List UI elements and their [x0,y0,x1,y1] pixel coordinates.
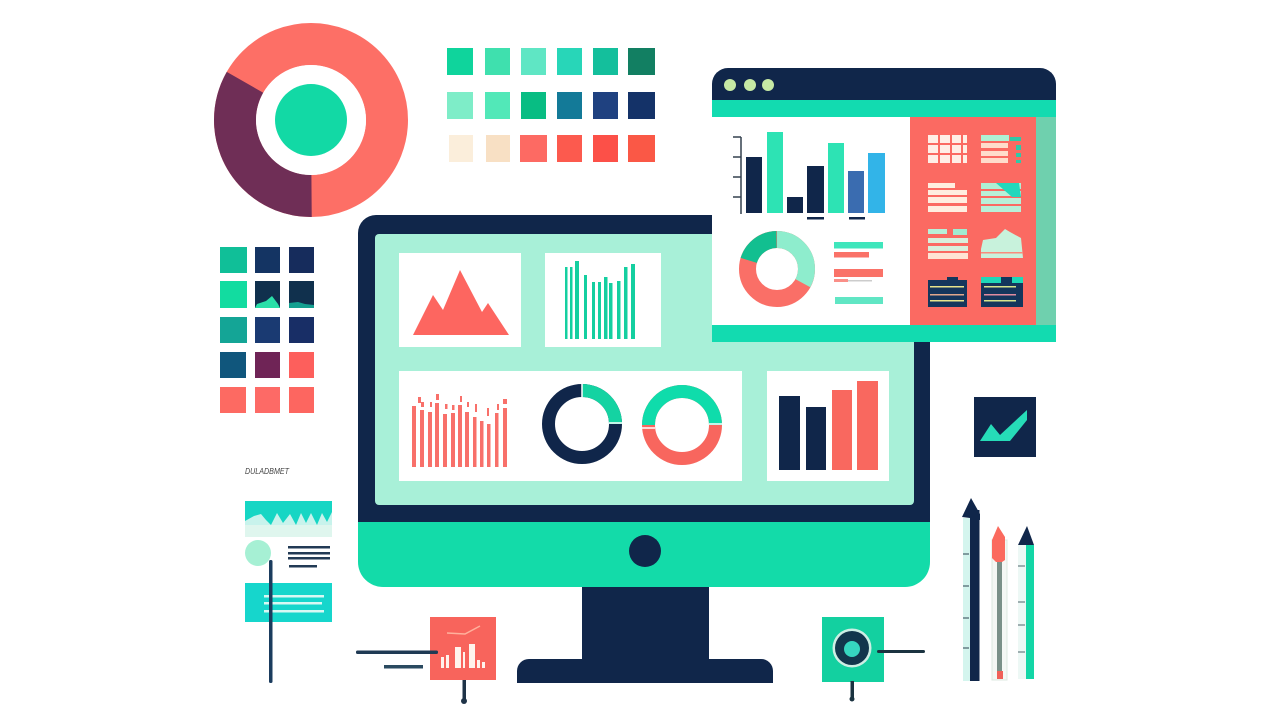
monitor stand [517,585,773,683]
mini document icon [928,183,967,212]
mini green document icon [981,183,1021,212]
mini navy and green list icon [981,277,1023,307]
mini list icon [981,135,1021,163]
mini area icon [981,229,1023,258]
window donut chart [740,232,814,306]
mini navy list icon [928,277,967,307]
window legend bars [834,242,883,304]
monitor body [358,215,930,522]
panel: wide charts [399,371,742,481]
icon: green gear tile [822,617,925,702]
monitor [358,215,930,683]
coral bar chart [412,394,507,467]
icon: coral pencil [992,526,1007,680]
window content [712,117,910,325]
icon: green pencil [1018,526,1034,679]
bar chart [733,132,885,220]
window side strip [1036,117,1056,325]
coral side panel [910,117,1036,325]
window bottom band [712,325,1056,342]
icon: coral chart tile [356,617,496,704]
mini mixed list icon [928,229,968,259]
window control dots [724,79,774,91]
panel: green bar chart [545,253,661,347]
panel: navy and coral bars [767,371,889,481]
colour swatch palette [447,48,655,162]
power button [629,535,661,567]
browser window [712,68,1056,342]
side report card [245,501,332,683]
monitor screen [375,234,914,505]
window title bar [712,68,1056,101]
panel: mountain chart [399,253,521,347]
monitor chin [358,522,930,587]
large donut chart [235,44,387,196]
navy and green donut [548,383,623,458]
icon: tall navy pencil [962,498,980,681]
mini table icon [928,135,967,163]
window accent band [712,100,1056,117]
square tile grid [220,247,314,413]
icon: trend tile [974,397,1036,457]
green and coral donut [641,392,723,458]
small caption: DULADBMET [245,467,290,476]
